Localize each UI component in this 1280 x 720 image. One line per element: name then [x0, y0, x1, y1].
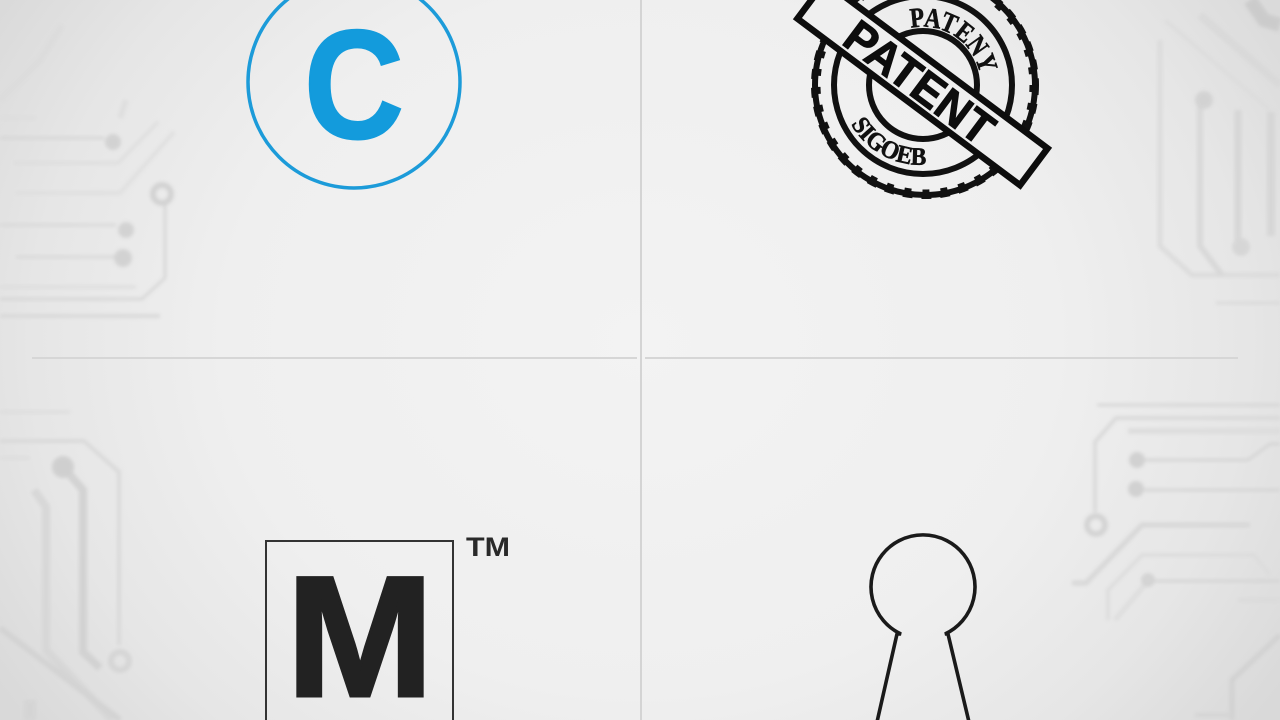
circuit traces: bottom left — [0, 412, 129, 720]
stamp ring text bottom: SIGOEB — [852, 117, 926, 166]
stamp banner: PATENT — [834, 10, 1005, 155]
icon: patent stamp — [792, 0, 1052, 199]
circuit traces: bottom right — [1072, 405, 1280, 720]
icon: copyright symbol: C — [304, 0, 404, 171]
icon: trademark box: TM — [466, 532, 510, 562]
icon: copyright symbol — [248, 0, 460, 188]
stamp banner — [795, 0, 1049, 188]
stamp ring text top: PATENY — [909, 8, 998, 70]
circuit traces: top right — [1160, 0, 1280, 303]
icon: keyhole — [871, 535, 975, 720]
icon: trademark box — [266, 532, 510, 720]
circuit traces: top left — [0, 25, 174, 316]
